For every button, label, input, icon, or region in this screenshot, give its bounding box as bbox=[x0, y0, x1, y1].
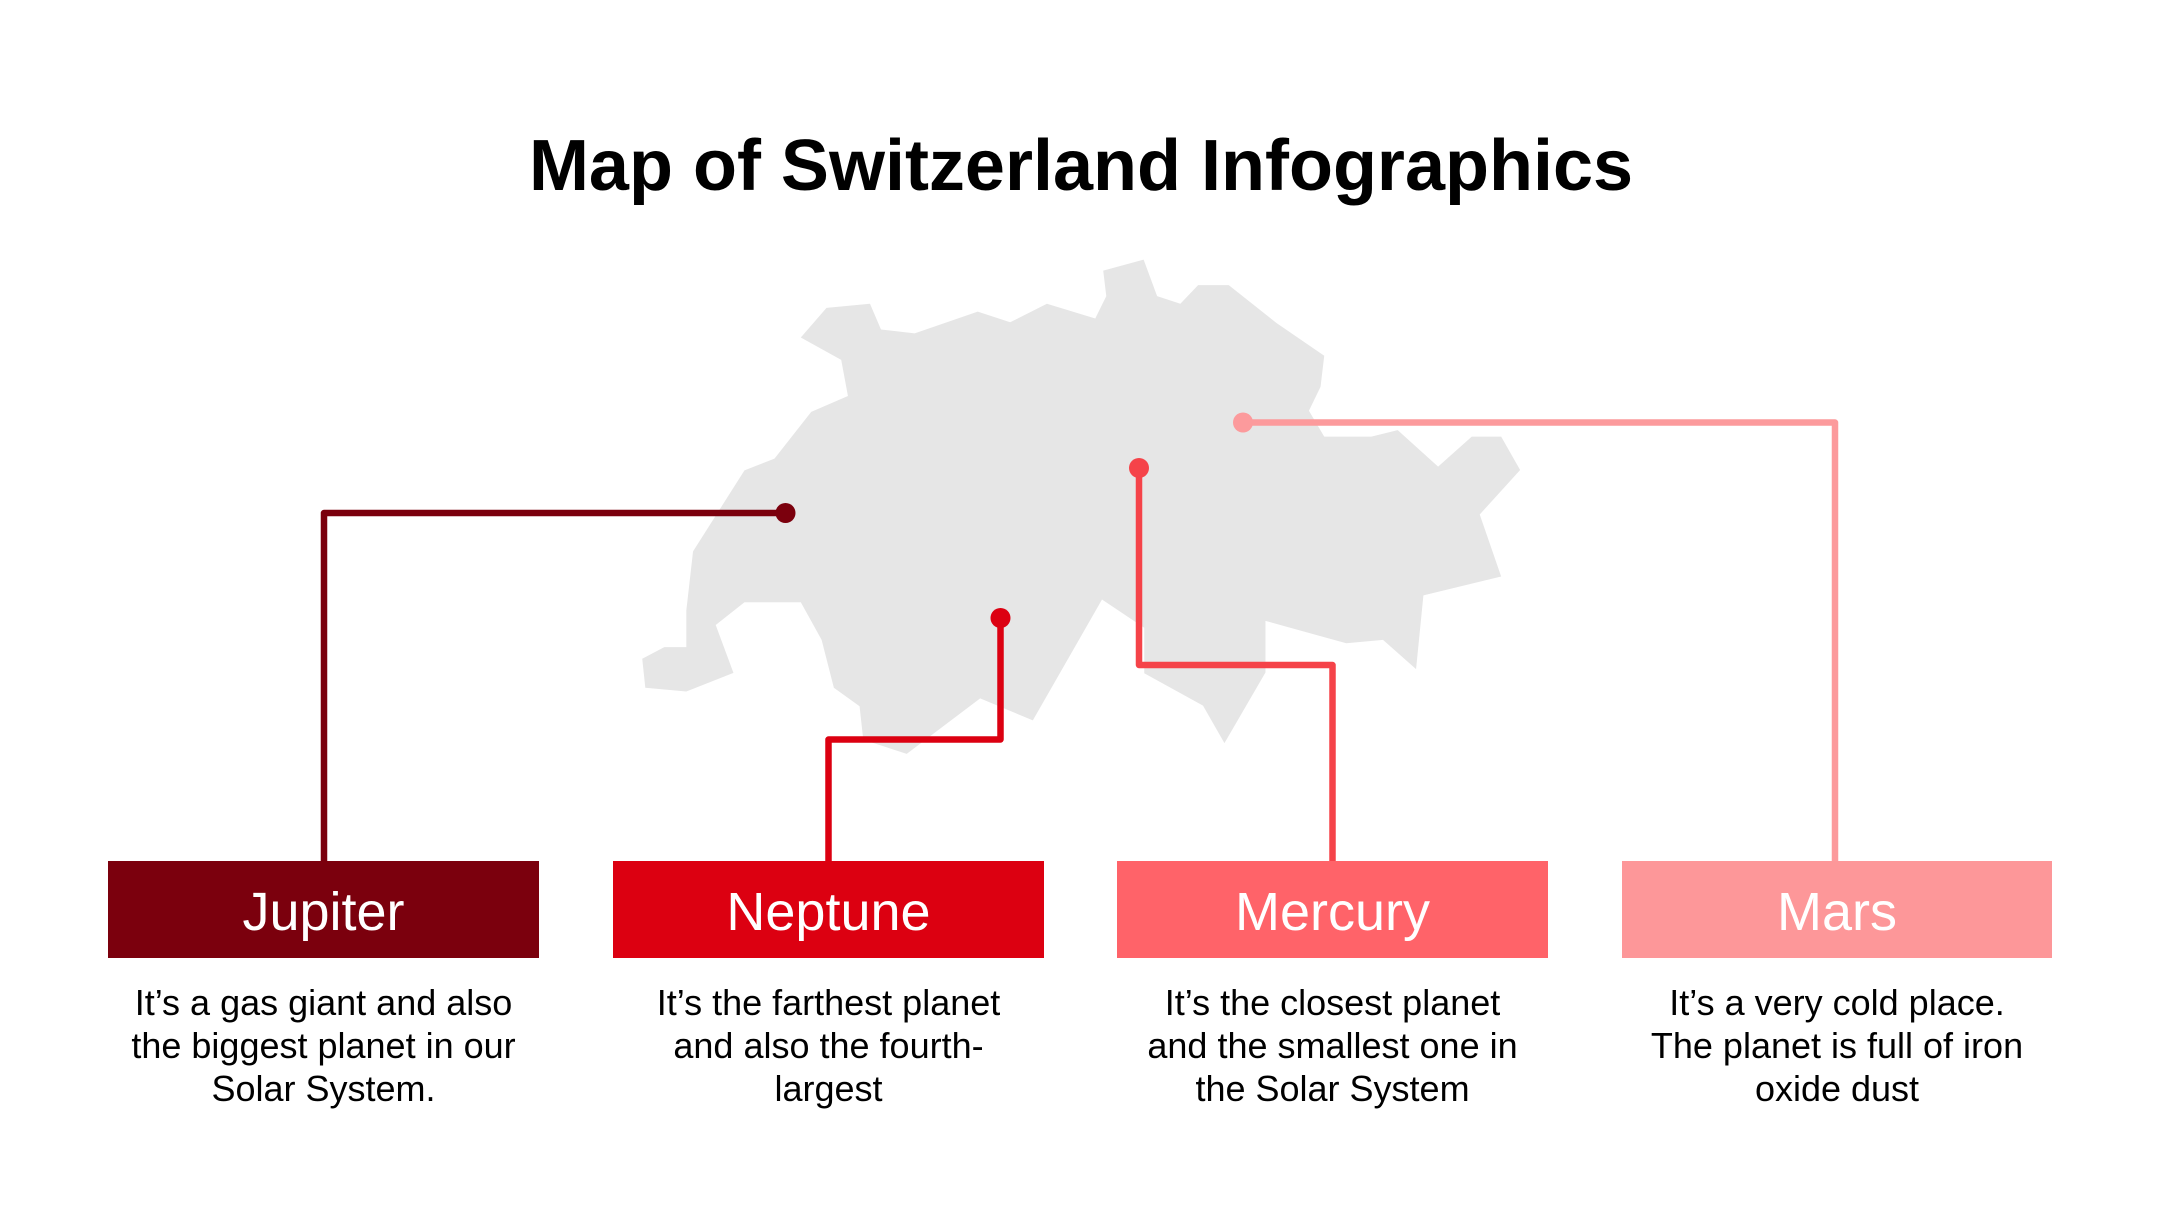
text: Jupiter description: It’s a gas giant and also bbox=[135, 982, 512, 1023]
text: Mars description: oxide dust bbox=[1755, 1068, 1919, 1109]
label box: Mars: Mars bbox=[1777, 882, 1897, 942]
text: Neptune description: and also the fourth- bbox=[673, 1025, 984, 1066]
map of Switzerland bbox=[642, 260, 1520, 754]
text: Mercury description: and the smallest one in bbox=[1147, 1025, 1518, 1066]
text: Neptune description bbox=[657, 982, 1000, 1109]
connector: Neptune bbox=[828, 608, 1010, 861]
text: Jupiter description: the biggest planet in our bbox=[131, 1025, 516, 1066]
title: Map of Switzerland Infographics bbox=[529, 126, 1633, 206]
text: Mars description: The planet is full of iron bbox=[1651, 1025, 2023, 1066]
text: Mercury description: the Solar System bbox=[1195, 1068, 1470, 1109]
text: Mercury description: It’s the closest planet bbox=[1165, 982, 1500, 1023]
text: Jupiter description bbox=[131, 982, 516, 1109]
label box: Jupiter: Jupiter bbox=[242, 882, 405, 942]
label box: Jupiter bbox=[108, 861, 539, 958]
label box: Neptune bbox=[613, 861, 1044, 958]
connector: Jupiter bbox=[324, 503, 796, 861]
label box: Mercury bbox=[1117, 861, 1548, 958]
label box: Mercury: Mercury bbox=[1235, 882, 1430, 942]
text: Neptune description: It’s the farthest planet bbox=[657, 982, 1000, 1023]
text: Jupiter description: Solar System. bbox=[211, 1068, 436, 1109]
text: Mars description: It’s a very cold place. bbox=[1669, 982, 2005, 1023]
text: Mercury description bbox=[1147, 982, 1518, 1109]
text: Mars description bbox=[1651, 982, 2023, 1109]
label box: Mars bbox=[1622, 861, 2052, 958]
label box: Neptune: Neptune bbox=[726, 882, 931, 942]
connector: Mars bbox=[1233, 412, 1835, 861]
text: Neptune description: largest bbox=[774, 1068, 883, 1109]
connector: Mercury bbox=[1129, 458, 1332, 861]
